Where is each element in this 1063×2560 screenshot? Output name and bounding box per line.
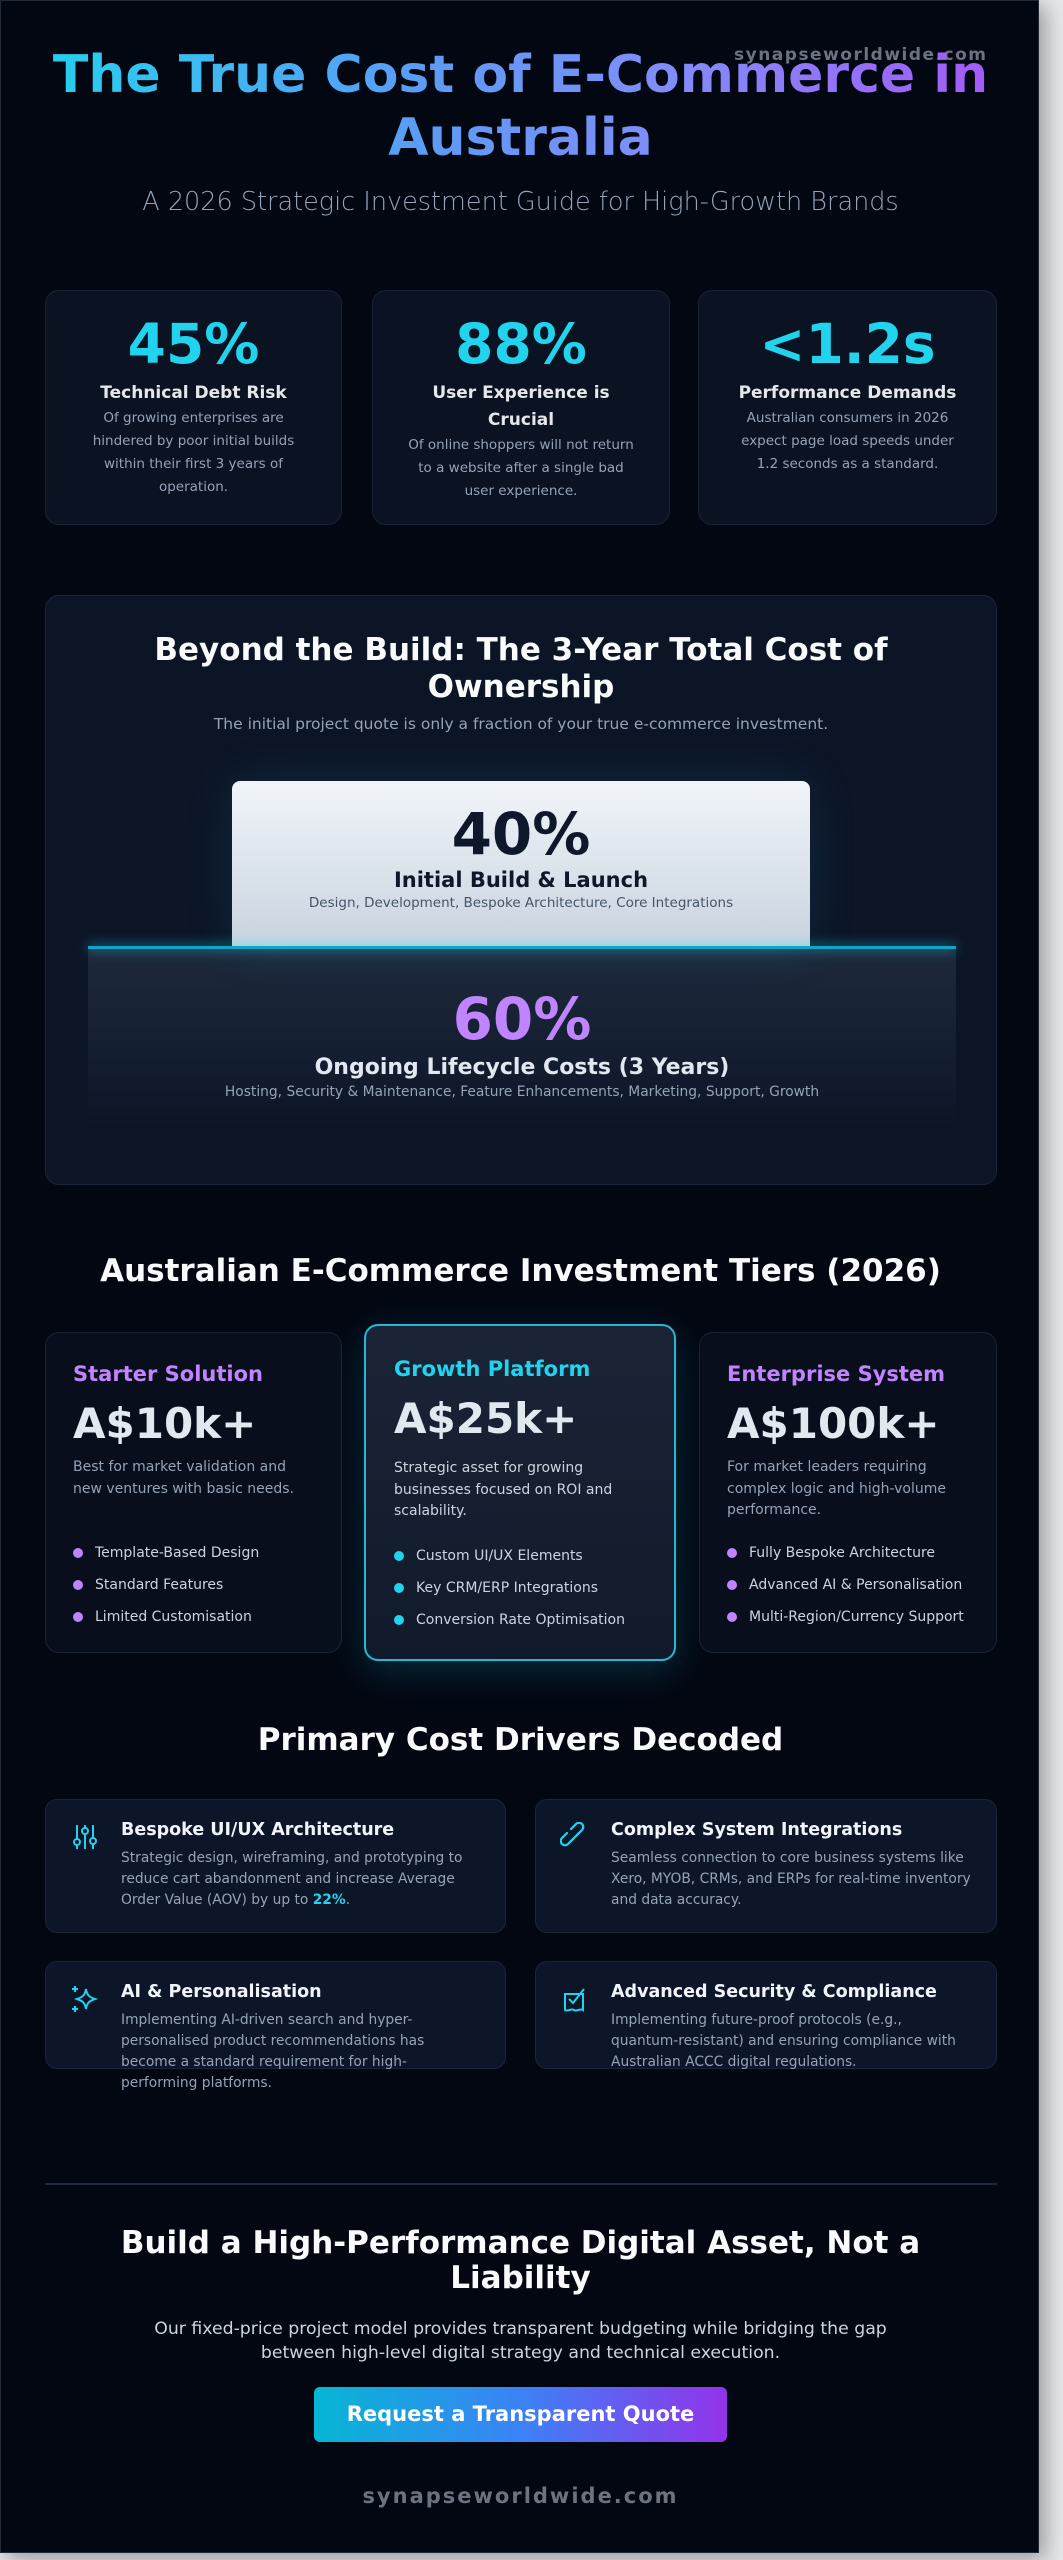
tier: starter: Limited Customisation [95, 1609, 252, 1625]
driver: integrations: Seamless connection to core business systems like Xero, MYOB, CRMs, and ERPs for real-time inventory and data accuracy. [611, 1850, 971, 1908]
heading: cost drivers: Primary Cost Drivers Decoded [258, 1722, 783, 1758]
stat card: 45% [45, 290, 342, 525]
tier: starter: Best for market validation and new ventures with basic needs. [73, 1459, 294, 1496]
heading: CTA: Build a High-Performance Digital Asset, Not a Liability [121, 2225, 920, 2296]
tier: starter [45, 1332, 342, 1653]
driver: AI [45, 1961, 506, 2069]
driver: security [535, 1961, 997, 2069]
driver: UI/UX: Strategic design, wireframing, and prototyping to reduce cart abandonment and increase Average Order Value (AOV) by up to 22%. [121, 1850, 462, 1908]
stat card: <1.2s: <1.2s [759, 312, 936, 376]
footer: synapseworldwide.com [362, 2484, 679, 2508]
tier: growth: Conversion Rate Optimisation [416, 1612, 625, 1628]
driver: UI/UX [45, 1799, 506, 1933]
tier: growth: Custom UI/UX Elements [416, 1548, 583, 1564]
stat card: <1.2s: Australian consumers in 2026 expect page load speeds under 1.2 seconds as a standard. [741, 410, 954, 472]
tier: starter: Starter Solution [73, 1362, 263, 1386]
chart: 40% initial: Design, Development, Bespoke Architecture, Core Integrations [309, 895, 733, 911]
watermark: synapseworldwide.com [734, 45, 988, 65]
driver: UI/UX: Bespoke UI/UX Architecture [121, 1820, 394, 1840]
stat card: 45%: Technical Debt Risk [100, 383, 287, 403]
tier: growth: Strategic asset for growing businesses focused on ROI and scalability. [394, 1460, 612, 1519]
tier: enterprise: Fully Bespoke Architecture [749, 1545, 935, 1561]
text block: The initial project quote is only a fraction of your true e-commerce investment. [214, 715, 828, 733]
driver: AI: AI & Personalisation [121, 1982, 322, 2002]
tier: growth [364, 1324, 676, 1661]
tier: starter: Template-Based Design [95, 1545, 259, 1561]
button: Request a Transparent Quote [347, 2402, 694, 2426]
stat card: 88%: 88% [455, 312, 587, 376]
icon: sparkles [72, 1986, 98, 2012]
title: The True Cost of E-Commerce in Australia [53, 45, 988, 168]
icon: sliders [73, 1825, 97, 1849]
tier: enterprise: Multi-Region/Currency Support [749, 1609, 964, 1625]
chart: 40% initial: 40% [452, 800, 590, 868]
stat card: 45%: 45% [128, 312, 259, 376]
chart: 60% ongoing: Hosting, Security & Maintenance, Feature Enhancements, Marketing, Support, Growth [225, 1084, 819, 1100]
driver: integrations: Complex System Integrations [611, 1820, 902, 1840]
stat card: 88%: User Experience is Crucial [432, 383, 610, 430]
tier: enterprise: Enterprise System [727, 1362, 945, 1386]
button [314, 2387, 727, 2442]
driver: integrations [535, 1799, 997, 1933]
chart: 60% ongoing: Ongoing Lifecycle Costs (3 Years) [315, 1055, 729, 1080]
tier: starter: A$10k+ [73, 1399, 256, 1448]
heading: tiers: Australian E-Commerce Investment Tiers (2026) [100, 1253, 941, 1289]
stat card: <1.2s [698, 290, 997, 525]
panel: total cost of ownership [45, 595, 997, 1185]
tier: growth: A$25k+ [394, 1394, 577, 1443]
driver: security: Advanced Security & Compliance [611, 1982, 937, 2002]
heading: Beyond the Build: The 3-Year Total Cost of Ownership [154, 632, 888, 705]
stat card: 88%: Of online shoppers will not return to a website after a single bad user experience. [408, 437, 634, 499]
tier: growth: Key CRM/ERP Integrations [416, 1580, 598, 1596]
stat card: 45%: Of growing enterprises are hindered by poor initial builds within their first 3 years of operation. [93, 410, 294, 495]
icon: link [560, 1822, 584, 1846]
tier: enterprise [699, 1332, 997, 1653]
text block: CTA: Our fixed-price project model provides transparent budgeting while bridging the gap between high-level digital strategy and technical execution. [154, 2319, 887, 2363]
chart: 60% ongoing [88, 947, 956, 1127]
chart: 40% initial: Initial Build & Launch [394, 868, 648, 892]
tier: enterprise: Advanced AI & Personalisation [749, 1577, 962, 1593]
tier: enterprise: For market leaders requiring complex logic and high-volume performance. [727, 1459, 946, 1518]
stat card: 88% [372, 290, 670, 525]
chart: 60% ongoing: 60% [453, 985, 591, 1053]
tier: growth: Growth Platform [394, 1357, 590, 1381]
driver: AI: Implementing AI-driven search and hyper-personalised product recommendations has become a standard requirement for high-performing platforms. [121, 2012, 424, 2091]
stat card: <1.2s: Performance Demands [739, 383, 956, 403]
tier: enterprise: A$100k+ [727, 1399, 940, 1448]
driver: security: Implementing future-proof protocols (e.g., quantum-resistant) and ensuring compliance with Australian ACCC digital regulations. [611, 2012, 956, 2070]
subtitle: A 2026 Strategic Investment Guide for High-Growth Brands [142, 187, 899, 217]
icon: shield check [564, 1988, 585, 2012]
chart: 40% initial [232, 781, 810, 947]
tier: starter: Standard Features [95, 1577, 223, 1593]
